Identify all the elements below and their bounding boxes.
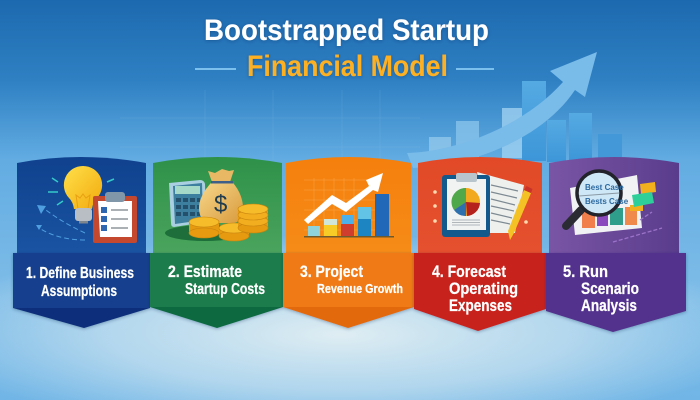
icon: scenario sheet bbox=[570, 175, 662, 242]
icon: pie chart clipboard bbox=[442, 173, 490, 237]
label 5 bbox=[563, 262, 639, 315]
title: Financial Model bbox=[247, 50, 448, 83]
card 1: define business assumptions bbox=[13, 157, 150, 328]
label 1: Assumptions bbox=[41, 283, 117, 300]
label 3: 3. Project bbox=[300, 262, 363, 281]
label 2 bbox=[168, 262, 265, 298]
icon: money bag: $ bbox=[214, 191, 227, 218]
card 3: project revenue growth bbox=[283, 157, 414, 328]
title: Bootstrapped Startup bbox=[204, 14, 489, 47]
icon: coins bbox=[189, 204, 268, 241]
label 2: Startup Costs bbox=[185, 281, 265, 298]
icon: light bulb bbox=[48, 166, 114, 224]
label 3 bbox=[300, 262, 403, 296]
icon: pencil bbox=[433, 186, 532, 240]
background growth chart bbox=[407, 52, 622, 168]
card 5: run scenario analysis bbox=[546, 157, 686, 332]
icon: report pages bbox=[477, 172, 524, 233]
label 2: 2. Estimate bbox=[168, 262, 242, 281]
label 1: 1. Define Business bbox=[26, 265, 134, 282]
label 4: Operating bbox=[449, 279, 518, 298]
icon: magnifying glass bbox=[566, 171, 629, 226]
title bbox=[195, 14, 494, 83]
card 2: estimate startup costs bbox=[150, 157, 283, 328]
label 5: 5. Run bbox=[563, 262, 608, 281]
label 3: Revenue Growth bbox=[317, 281, 403, 296]
icon: checklist clipboard bbox=[93, 192, 137, 243]
icon: growth bar chart bbox=[304, 173, 394, 238]
icon: money bag bbox=[199, 169, 243, 223]
label 4: 4. Forecast bbox=[432, 262, 506, 281]
card 4: forecast operating expenses bbox=[414, 157, 546, 331]
label 4 bbox=[432, 262, 518, 315]
icon: magnifying glass: Bests Case bbox=[585, 197, 629, 206]
label 4: Expenses bbox=[449, 296, 512, 315]
icon: calculator bbox=[165, 180, 245, 241]
label 1 bbox=[26, 265, 134, 300]
label 5: Scenario bbox=[581, 279, 639, 298]
icon: dashed arrows bbox=[36, 205, 85, 240]
icon: magnifying glass: Best Case bbox=[585, 183, 624, 192]
label 5: Analysis bbox=[581, 296, 637, 315]
